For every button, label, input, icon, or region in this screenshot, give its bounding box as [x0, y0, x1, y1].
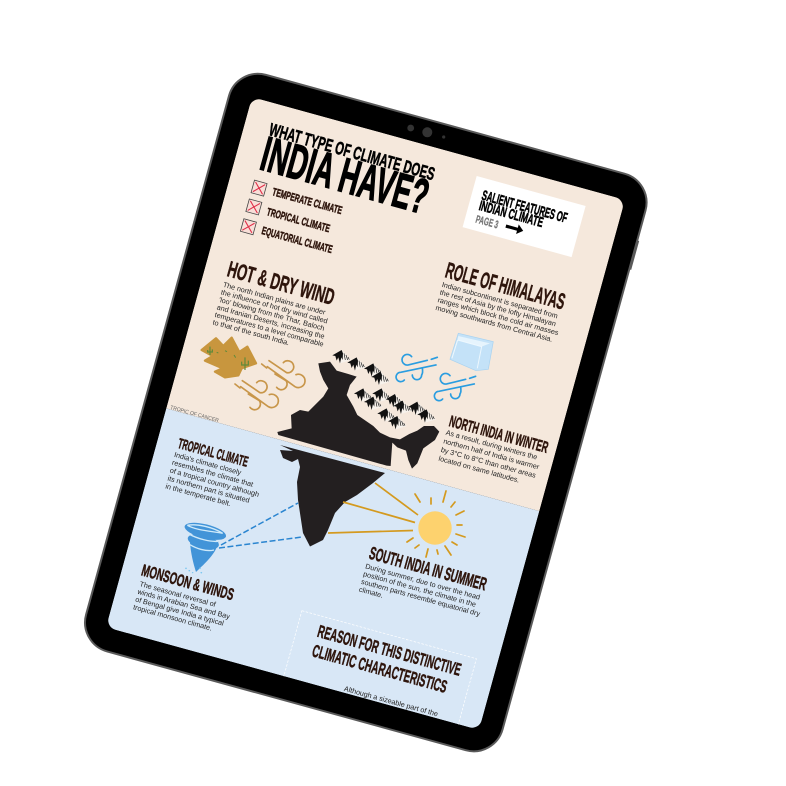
- section: hot and dry wind: temperatures to a level comparable: [214, 310, 325, 349]
- callout: salient features: INDIAN CLIMATE: [477, 197, 545, 230]
- checklist: [240, 180, 345, 256]
- callout: salient features: PAGE 3: [474, 214, 500, 231]
- section: monsoon and winds: winds in Arabian Sea and Bay: [135, 587, 231, 621]
- panel: upper cream area: [166, 97, 625, 511]
- wind upper: [262, 361, 305, 390]
- section: role of himalayas: ranges which block the cold air masses: [437, 295, 560, 337]
- callout: salient features: SALIENT FEATURES OF: [480, 187, 570, 226]
- device body: [78, 67, 653, 758]
- section: role of himalayas: moving southwards from Central Asia.: [435, 303, 554, 344]
- section: tropical climate: TROPICAL CLIMATE: [176, 436, 250, 471]
- section: south india in summer: During summer, due to over the head: [364, 561, 481, 602]
- section: north india in winter: NORTH INDIA IN WINTER: [447, 413, 550, 457]
- section: reason heading: [304, 621, 463, 721]
- section: tropical climate: resembles the climate that: [171, 458, 254, 489]
- icon: ice cube: [450, 333, 493, 371]
- wind lower: [434, 373, 476, 401]
- side buttons: [630, 241, 639, 270]
- icon: desert: [202, 338, 256, 377]
- section: tropical climate: [164, 436, 268, 515]
- section: hot and dry wind: 'loo' blowing from the Thar, Baloch: [218, 295, 326, 333]
- section: tropical climate: its northern part is situated: [167, 474, 251, 505]
- title line 1: WHAT TYPE OF CLIMATE DOES: [267, 119, 437, 184]
- section: hot and dry wind: and Iranian Deserts, increasing the: [216, 303, 326, 341]
- section: north india in winter: northern half of India is warmer: [442, 436, 541, 472]
- callout: salient features: [463, 176, 586, 257]
- section: monsoon and winds: tropical monsoon climate.: [132, 602, 213, 633]
- icon: hot winds: [235, 361, 305, 410]
- tablet device: [78, 67, 655, 759]
- section: monsoon and winds: The seasonal reversal of: [139, 579, 217, 609]
- section: south india in summer: climate.: [358, 585, 384, 600]
- map: north india: [277, 362, 439, 469]
- section: hot and dry wind: HOT & DRY WIND: [225, 257, 337, 310]
- section: tropical climate: India's climate closely: [173, 450, 243, 477]
- section: south india in summer: southern parts resemble equatorial dry: [360, 577, 482, 618]
- icon: mountains: [332, 350, 436, 429]
- section: tropical climate: of a tropical country although: [169, 466, 260, 499]
- section: reason heading: Although a sizeable part of the: [343, 684, 439, 718]
- section: monsoon and winds: MONSOON & WINDS: [139, 562, 236, 604]
- section: role of himalayas: ROLE OF HIMALAYAS: [443, 258, 568, 314]
- camera: [407, 125, 445, 139]
- section: role of himalayas: [435, 258, 570, 345]
- section: north india in winter: located on same latitudes.: [438, 454, 521, 485]
- section: role of himalayas: Indian subcontinent is separated from: [441, 280, 559, 320]
- dashed box: reason: [284, 610, 477, 724]
- section: north india in winter: [438, 413, 550, 490]
- wind upper: [396, 354, 437, 382]
- section: tropical climate: in the temperate belt.: [164, 481, 232, 508]
- icon: arrow: [505, 221, 525, 236]
- panel: lower blue area: [106, 408, 539, 730]
- section: north india in winter: As a result, during winters the: [445, 428, 538, 462]
- section: role of himalayas: the rest of Asia by the lofty Himalayan: [439, 288, 557, 328]
- label: tropic of cancer: TROPIC OF CANCER: [169, 405, 219, 424]
- screen: [100, 97, 625, 751]
- section: hot and dry wind: [212, 256, 340, 356]
- section: hot and dry wind: the influence of hot dry wind called: [220, 287, 329, 325]
- section: reason heading: CLIMATIC CHARACTERISTICS: [310, 641, 449, 697]
- map: south india: [280, 445, 385, 546]
- lines to sun: [328, 483, 418, 533]
- section: south india in summer: position of the sun, the climate in the: [362, 569, 477, 609]
- section: south india in summer: SOUTH INDIA IN SUMMER: [367, 543, 489, 594]
- dashed lines to cyclone: [219, 503, 302, 548]
- title line 2: INDIA HAVE?: [255, 127, 434, 225]
- section: north india in winter: by 3°C to 8°C than other areas: [440, 445, 537, 480]
- wind lower: [235, 381, 278, 410]
- section: reason heading: REASON FOR THIS DISTINCTIVE: [315, 621, 463, 680]
- item: tropical: TROPICAL CLIMATE: [265, 206, 331, 235]
- section: south india in summer: [358, 543, 491, 626]
- section: hot and dry wind: The north Indian plains are under: [222, 280, 327, 317]
- map: india: [277, 362, 439, 546]
- icon: cyclone: [183, 519, 228, 573]
- item: equatorial: EQUATORIAL CLIMATE: [260, 225, 334, 256]
- item: temperate: TEMPERATE CLIMATE: [271, 186, 343, 217]
- section: hot and dry wind: to that of the south India.: [212, 318, 290, 347]
- section: monsoon and winds: of Bengal give India a typical: [134, 595, 225, 628]
- icon: sun: [407, 491, 465, 557]
- icon: cold winds: [396, 354, 476, 401]
- section: monsoon and winds: [131, 562, 238, 637]
